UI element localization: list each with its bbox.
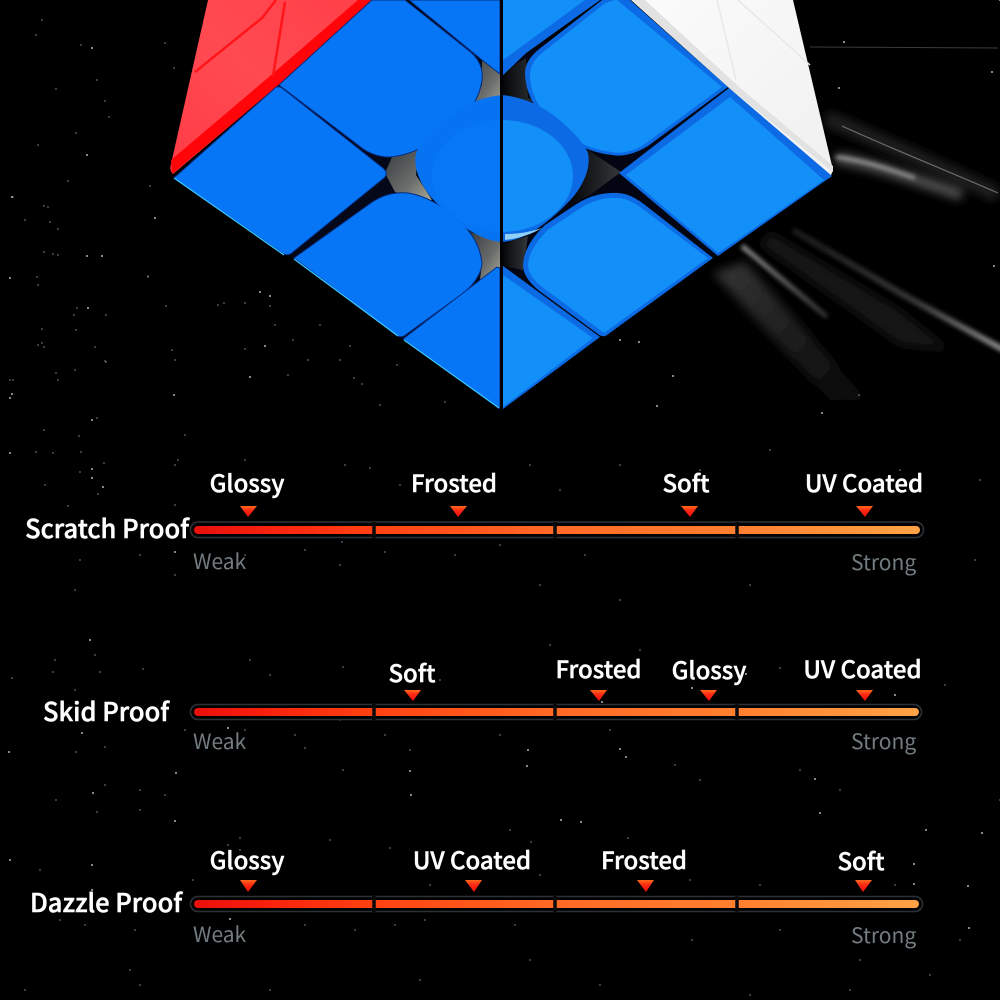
marker: UV Coated xyxy=(413,841,531,892)
strength bar xyxy=(190,522,924,538)
rating row: Dazzle Proof xyxy=(30,841,922,950)
row heading: Dazzle Proof xyxy=(30,883,183,920)
rating row: Scratch Proof xyxy=(25,464,924,577)
center cap xyxy=(415,95,589,242)
scale label: Strong: Strong xyxy=(851,547,916,577)
red face xyxy=(170,0,372,174)
scale label: Weak: Weak xyxy=(193,546,247,576)
blue stickers: right half xyxy=(503,0,832,409)
scale label: Strong: Strong xyxy=(851,726,916,756)
marker: Glossy: Glossy xyxy=(210,841,284,876)
strength bar xyxy=(190,704,922,720)
lit lower edges of the left stickers xyxy=(174,178,499,408)
streaks: motion light rays right of the cube xyxy=(713,47,1000,400)
marker: Glossy: Glossy xyxy=(210,464,284,499)
marker: Soft xyxy=(837,842,885,892)
marker: Frosted xyxy=(411,464,497,517)
scale label: Strong: Strong xyxy=(851,920,916,950)
blue stickers: left half xyxy=(174,0,500,409)
marker: Frosted xyxy=(555,650,642,701)
rating row: Skid Proof xyxy=(43,650,922,756)
center split line xyxy=(500,0,503,410)
grey gaps under the stickers xyxy=(280,30,726,400)
marker: UV Coated xyxy=(803,650,922,701)
marker: Glossy xyxy=(210,841,284,892)
row heading: Scratch Proof xyxy=(25,509,190,546)
marker: Frosted xyxy=(601,841,687,892)
scale label: Weak: Weak xyxy=(193,726,247,756)
marker: Frosted: Frosted xyxy=(555,650,642,685)
marker: Glossy xyxy=(210,464,284,517)
marker: Soft: Soft xyxy=(837,842,885,877)
marker: Soft: Soft xyxy=(388,654,436,689)
cube: multicolour speed cube corner xyxy=(170,0,833,410)
strength bar xyxy=(190,896,922,912)
marker: UV Coated: UV Coated xyxy=(803,650,922,685)
marker: UV Coated xyxy=(805,464,923,517)
marker: Frosted: Frosted xyxy=(601,841,687,876)
row heading: Skid Proof xyxy=(43,692,170,729)
marker: UV Coated: UV Coated xyxy=(805,464,923,499)
marker: Frosted: Frosted xyxy=(411,464,497,499)
marker: Soft: Soft xyxy=(662,464,710,499)
marker: Glossy: Glossy xyxy=(672,651,746,686)
marker: UV Coated: UV Coated xyxy=(413,841,531,876)
scale label: Weak: Weak xyxy=(193,919,247,949)
white face xyxy=(631,0,833,178)
marker: Soft xyxy=(662,464,710,517)
